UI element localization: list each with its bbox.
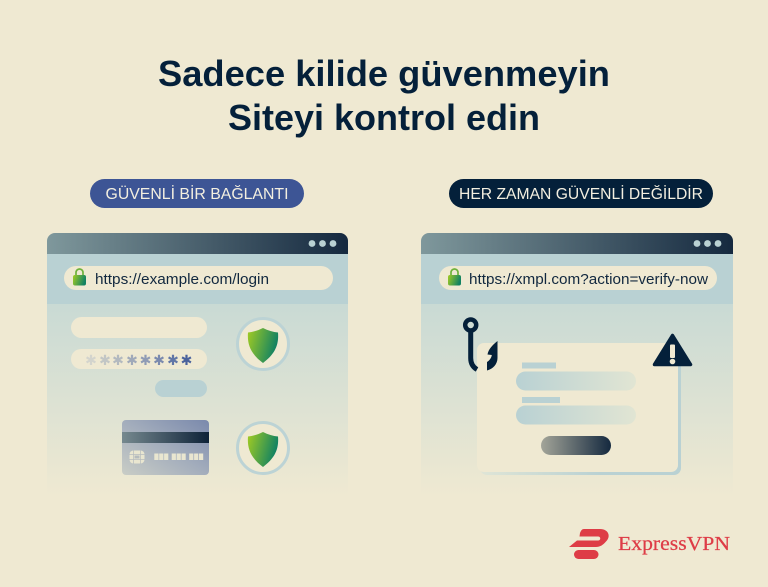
title bar: [47, 233, 348, 254]
browser body: [421, 304, 733, 496]
password field: [71, 349, 207, 369]
badge: not always secure: HER ZAMAN GÜVENLİ DEĞİLDİR: [459, 184, 703, 203]
window dots: [694, 240, 721, 247]
panel: phishing browser window: [421, 233, 733, 496]
password field: ✱: [181, 353, 192, 369]
address bar: [439, 266, 717, 290]
password field: ✱: [140, 353, 151, 369]
password field: ✱: [85, 353, 97, 369]
password field: ✱: [126, 353, 138, 369]
title: [158, 53, 610, 138]
address bar: [64, 266, 333, 290]
logo wordmark: ExpressVPN: [618, 533, 730, 555]
panel: secure browser window: [47, 233, 348, 496]
address bar: https://xmpl.com?action=verify-now: [469, 272, 709, 288]
address bar: https://example.com/login: [95, 272, 269, 288]
title bar: [421, 233, 733, 254]
badge: secure connection: [90, 179, 304, 208]
login field: [71, 317, 207, 338]
password field: ✱: [153, 353, 165, 369]
address band: [421, 254, 733, 304]
icon: shield badge bottom: [238, 422, 288, 474]
title: Siteyi kontrol edin: [228, 97, 540, 138]
logo mark: [569, 529, 609, 547]
icon: shield badge top: [238, 318, 288, 370]
password field: ✱: [99, 353, 111, 369]
password field: ✱: [112, 353, 124, 369]
submit button: [155, 380, 207, 397]
phishing form card: [477, 343, 681, 475]
icon: warning triangle: [654, 336, 690, 364]
badge: secure connection: GÜVENLİ BİR BAĞLANTI: [106, 184, 288, 203]
window dots: [309, 240, 336, 247]
icon: fishing hook: [465, 320, 498, 370]
logo: ExpressVPN: [569, 529, 730, 559]
password field: ✱: [167, 353, 179, 369]
address band: [47, 254, 348, 304]
title: Sadece kilide güvenmeyin: [158, 53, 610, 94]
credit card: [122, 420, 209, 475]
browser body: [47, 304, 348, 496]
badge: not always secure: [449, 179, 713, 208]
